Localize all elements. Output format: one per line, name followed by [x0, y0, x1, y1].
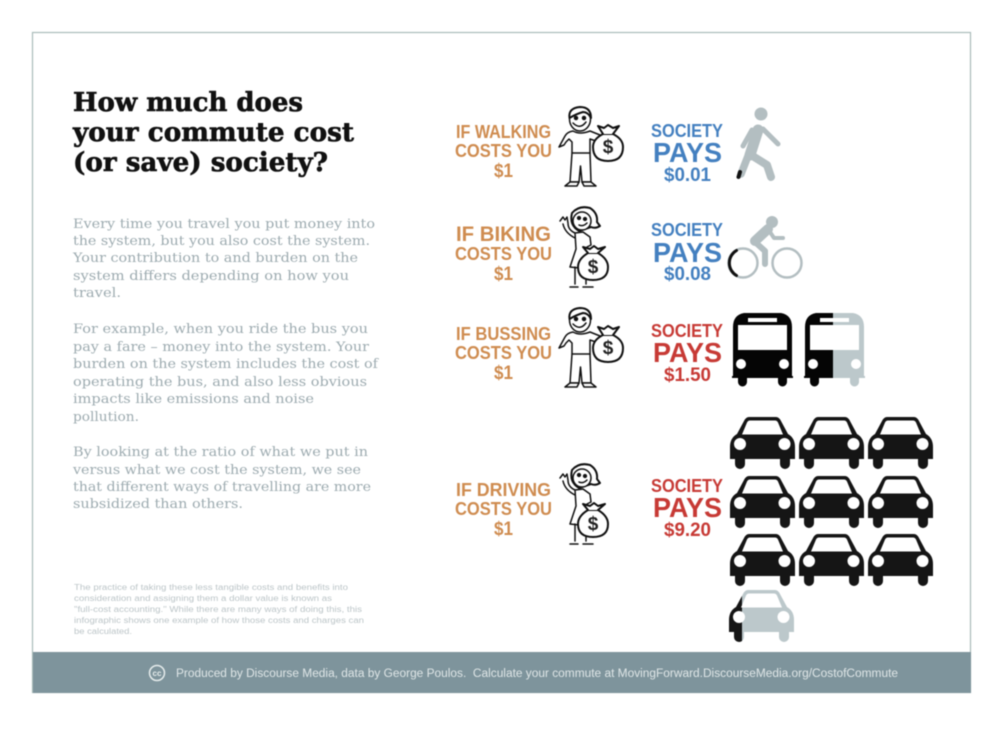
label: society pays $1.50	[651, 321, 723, 386]
label: if bussing costs you	[455, 324, 552, 384]
row: walking	[455, 107, 778, 186]
label: society pays $0.08: $0.08	[664, 264, 711, 285]
text block: bus example paragraph: impacts like emissions and noise	[73, 392, 314, 407]
text block: bus example paragraph: burden on the system includes the cost of	[73, 357, 379, 372]
icon: bus half	[804, 313, 865, 386]
label: if bussing costs you: IF BUSSING	[456, 324, 551, 344]
text block: footnote: "full-cost accounting." While there are many ways of doing this, this	[74, 605, 362, 614]
text block: ratio paragraph: subsidized than others.	[73, 497, 243, 512]
label: if biking costs you: $1	[494, 264, 513, 285]
text block: footnote	[74, 583, 364, 636]
text block: intro paragraph: the system, but you also cost the system.	[73, 234, 370, 249]
footer credit text: Produced by Discourse Media, data by George Poulos. Calculate your commute at MovingForward.DiscourseMedia.org/CostofCommute	[176, 668, 898, 680]
text block: footnote: be calculated.	[74, 627, 132, 636]
icon: creative commons	[150, 666, 164, 680]
row: driving	[455, 417, 933, 642]
text block: ratio paragraph	[72, 445, 371, 512]
text block: bus example paragraph: For example, when you ride the bus you	[73, 322, 368, 337]
text block: ratio paragraph: By looking at the ratio of what we put in	[73, 445, 369, 460]
label: if bussing costs you: $1	[494, 363, 513, 384]
label: if driving costs you: $1	[494, 519, 513, 540]
icon: woman with money bag	[560, 464, 608, 544]
label: if walking costs you: IF WALKING	[456, 122, 551, 142]
label: if driving costs you	[455, 480, 552, 540]
text block: bus example paragraph	[73, 322, 379, 425]
label: society pays $9.20: PAYS	[653, 492, 722, 523]
text block: ratio paragraph: that different ways of travelling are more	[73, 480, 371, 495]
label: if bussing costs you: COSTS YOU	[455, 343, 552, 363]
label: society pays $0.01: SOCIETY	[651, 121, 723, 141]
title: your commute cost	[72, 118, 354, 148]
label: if biking costs you: IF BIKING	[456, 223, 551, 246]
label: society pays $0.01	[651, 121, 723, 186]
label: society pays $9.20: SOCIETY	[651, 476, 723, 496]
row: bussing	[455, 308, 865, 387]
label: if biking costs you: COSTS YOU	[455, 244, 552, 264]
icon: bus full	[732, 313, 793, 386]
row: biking	[455, 207, 802, 287]
text block: bus example paragraph: operating the bus, and also less obvious	[73, 375, 367, 390]
title: (or save) society?	[73, 148, 328, 178]
label: society pays $0.01: PAYS	[653, 137, 722, 168]
label: society pays $9.20: $9.20	[664, 520, 711, 541]
label: society pays $0.01: $0.01	[664, 165, 711, 186]
text block: footnote: infographic shows one example of how those costs and charges can	[74, 616, 364, 625]
icon group: nine full cars and one partial car	[729, 417, 933, 642]
title	[72, 88, 354, 178]
label: if walking costs you	[455, 122, 552, 182]
label: if walking costs you: COSTS YOU	[455, 141, 552, 161]
label: if biking costs you	[455, 223, 552, 285]
text block: intro paragraph	[72, 217, 375, 301]
icon: man with money bag	[559, 107, 623, 186]
footer band	[33, 652, 971, 693]
label: if walking costs you: $1	[494, 161, 513, 182]
label: society pays $9.20	[651, 476, 723, 541]
label: society pays $1.50: PAYS	[653, 337, 722, 368]
text block: bus example paragraph: pay a fare – money into the system. Your	[73, 340, 370, 355]
label: society pays $0.08: SOCIETY	[651, 220, 723, 240]
icon: man with money bag	[559, 308, 623, 387]
icon: creative commons: cc	[153, 669, 162, 678]
text block: intro paragraph: Every time you travel you put money into	[73, 217, 375, 232]
icon: woman with money bag	[560, 207, 608, 287]
label: society pays $1.50: $1.50	[664, 365, 711, 386]
text block: bus example paragraph: pollution.	[73, 410, 139, 425]
text block: intro paragraph: Your contribution to and burden on the	[72, 251, 358, 266]
label: if driving costs you: IF DRIVING	[456, 480, 551, 500]
text block: ratio paragraph: versus what we cost the system, we see	[72, 463, 361, 478]
text block: intro paragraph: system differs depending on how you	[73, 269, 349, 284]
label: society pays $0.08	[651, 220, 723, 285]
text block: intro paragraph: travel.	[73, 286, 121, 301]
title: How much does	[73, 88, 303, 118]
label: if driving costs you: COSTS YOU	[455, 499, 552, 519]
icon: walking person	[738, 108, 778, 177]
icon: cyclist	[728, 216, 802, 278]
text block: footnote: The practice of taking these less tangible costs and benefits into	[74, 583, 349, 592]
text block: footnote: consideration and assigning them a dollar value is known as	[74, 594, 332, 603]
label: society pays $1.50: SOCIETY	[651, 321, 723, 341]
label: society pays $0.08: PAYS	[653, 237, 722, 268]
